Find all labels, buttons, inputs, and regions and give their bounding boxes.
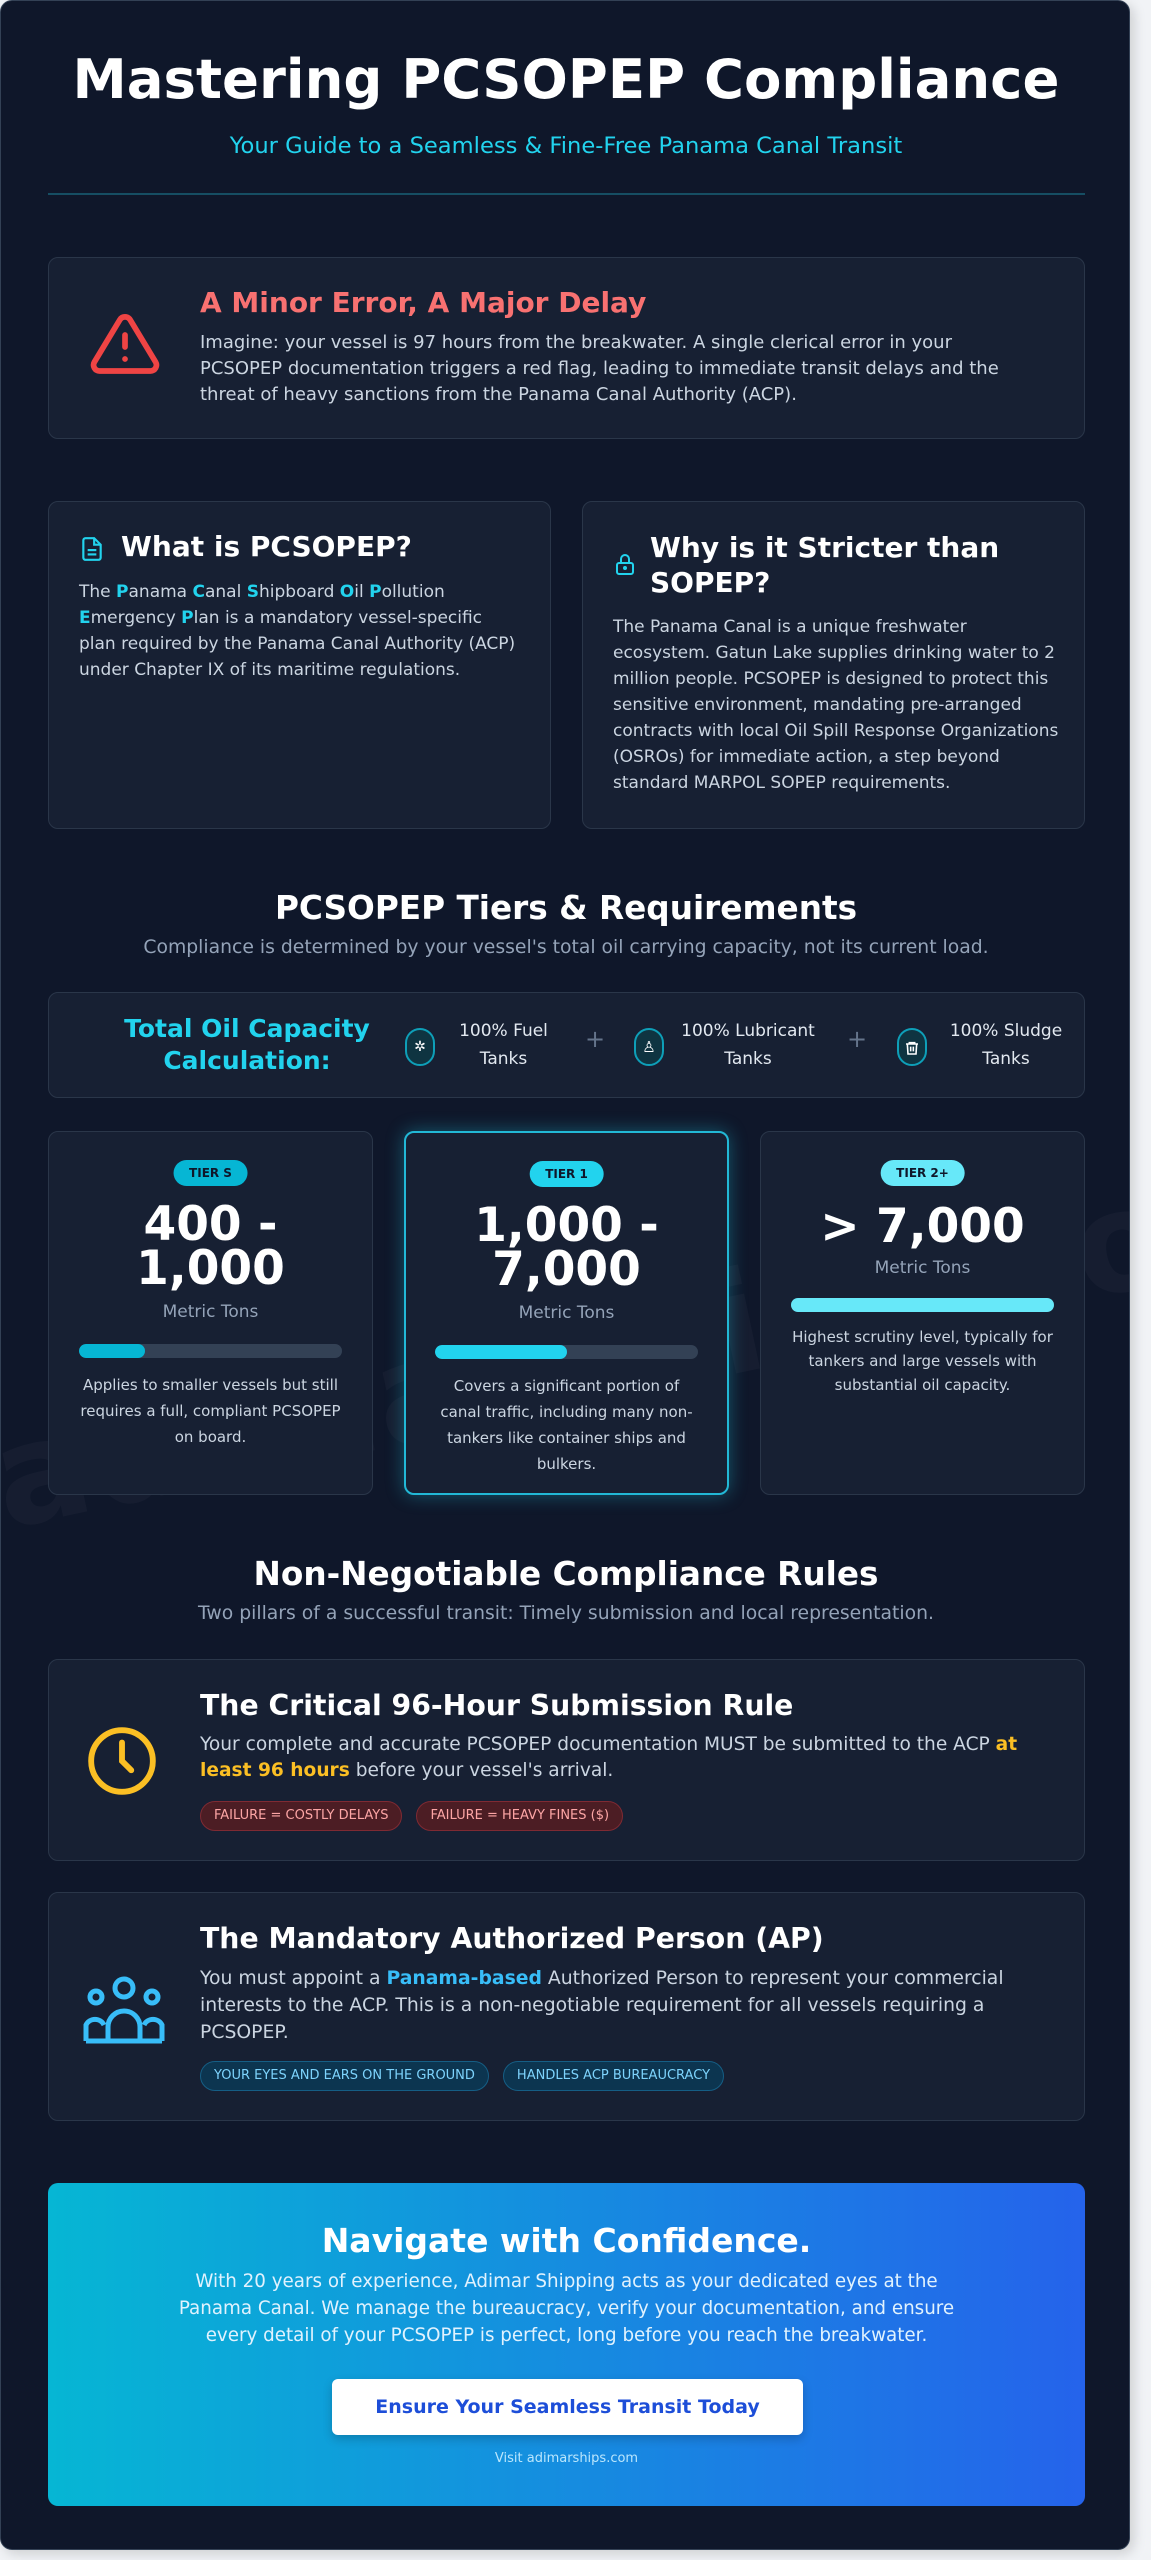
panel: calculation [48, 992, 1085, 1098]
pills: FAILURE = COSTLY DELAYS [214, 1808, 388, 1823]
alert text: Imagine: your vessel is 97 hours from the breakwater. A single clerical error in your PCSOPEP documentation triggers a red flag, leading to immediate transit delays and the threat of heavy sanctions from the Panama Canal Authority (ACP). [200, 332, 999, 405]
item: sludge: 100% Sludge [950, 1021, 1062, 1041]
panel: tier 2+: TIER 2+ [896, 1166, 949, 1180]
panel: tier S: Metric Tons [163, 1302, 258, 1322]
panel: tier S: 400 - [144, 1197, 277, 1252]
panel: tier 1: TIER 1 [545, 1167, 588, 1181]
item: fuel: ✲ [414, 1039, 426, 1055]
panel: tier S: Applies to smaller vessels but still requires a full, compliant PCSOPEP on board. [80, 1376, 341, 1446]
panel: tier 2+ [760, 1131, 1085, 1495]
link: Visit adimarships.com [495, 2451, 638, 2466]
pills: FAILURE = HEAVY FINES ($) [430, 1808, 609, 1823]
item: lubricant [634, 1021, 815, 1069]
cta button [332, 2379, 803, 2435]
text: Your complete and accurate PCSOPEP documentation MUST be submitted to the ACP at least 96 hours before your vessel's arrival. [200, 1734, 1017, 1781]
pills [200, 1801, 623, 1831]
item: fuel: Tanks [480, 1049, 527, 1069]
panel: authorized person [48, 1892, 1085, 2121]
panel: tier 1: 7,000 [492, 1242, 641, 1297]
plus: + [585, 1025, 605, 1053]
subheading: rules: Two pillars of a successful transit: Timely submission and local representation. [198, 1603, 934, 1624]
text: You must appoint a Panama-based Authorized Person to represent your commercial interests to the ACP. This is a non-negotiable requirement for all vessels requiring a PCSOPEP. [200, 1968, 1004, 2043]
heading: What is PCSOPEP? [121, 530, 412, 563]
icon: lock [616, 554, 634, 575]
panel: tier 1: Covers a significant portion of canal traffic, including many non-tankers like container ships and bulkers. [440, 1377, 693, 1473]
pills: YOUR EYES AND EARS ON THE GROUND [214, 2068, 475, 2083]
heading: tiers: PCSOPEP Tiers & Requirements [275, 889, 857, 927]
item: lubricant: Tanks [724, 1049, 772, 1069]
text: The Panama Canal Shipboard Oil Pollution Emergency Plan is a mandatory vessel-specific plan required by the Panama Canal Authority (ACP) under Chapter IX of its maritime regulations. [79, 582, 515, 680]
item: fuel [405, 1021, 548, 1069]
calc label: Calculation: [163, 1046, 331, 1075]
panel: tier 2+: Highest scrutiny level, typically for tankers and large vessels with substantial oil capacity. [792, 1328, 1053, 1394]
panel: tier S: 1,000 [136, 1241, 285, 1296]
pills: HANDLES ACP BUREAUCRACY [517, 2068, 710, 2083]
heading: rules: Non-Negotiable Compliance Rules [254, 1555, 878, 1593]
item: sludge [897, 1021, 1062, 1069]
panel: 96-hour rule [48, 1659, 1085, 1861]
pills [200, 2061, 724, 2091]
heading: The Critical 96-Hour Submission Rule [200, 1689, 793, 1722]
icon: warning [90, 314, 160, 374]
panel: tier 1 [404, 1131, 729, 1495]
panel: stricter [582, 501, 1085, 829]
icon: clock [88, 1727, 156, 1795]
plus: + [847, 1025, 867, 1053]
panel: alert [48, 257, 1085, 439]
panel: tier 2+: > 7,000 [820, 1199, 1025, 1254]
panel: tier 1: Metric Tons [519, 1303, 614, 1323]
item: sludge: Tanks [982, 1049, 1030, 1069]
panel: tier S: TIER S [189, 1166, 232, 1180]
heading: The Mandatory Authorized Person (AP) [200, 1922, 824, 1955]
panel: tier 1: 1,000 - [474, 1198, 659, 1253]
alert heading: A Minor Error, A Major Delay [200, 286, 646, 319]
icon: document [82, 537, 102, 561]
cta text: With 20 years of experience, Adimar Shipping acts as your dedicated eyes at the Panama Canal. We manage the bureaucracy, verify your documentation, and ensure every detail of your PCSOPEP is perfect, long before you reach the breakwater. [179, 2271, 954, 2346]
item: lubricant: 100% Lubricant [681, 1021, 815, 1041]
cta button: Ensure Your Seamless Transit Today [375, 2396, 760, 2418]
panel: what is [48, 501, 551, 829]
icon: people [84, 1976, 164, 2044]
calc label [124, 1014, 370, 1075]
panel: call to action [48, 2183, 1085, 2506]
cta heading: Navigate with Confidence. [322, 2221, 811, 2260]
panel: tier 2+: Metric Tons [875, 1258, 970, 1278]
item: fuel: 100% Fuel [459, 1021, 548, 1041]
item: lubricant: ♙ [642, 1038, 656, 1056]
subheading: tiers: Compliance is determined by your vessel's total oil carrying capacity, not its current load. [143, 937, 989, 958]
calc label: Total Oil Capacity [124, 1014, 370, 1043]
panel: tier S [48, 1131, 373, 1495]
subtitle: Your Guide to a Seamless & Fine-Free Panama Canal Transit [230, 133, 902, 159]
heading: Why is it Stricter than SOPEP? [650, 531, 999, 599]
title: Mastering PCSOPEP Compliance [73, 47, 1059, 111]
text: The Panama Canal is a unique freshwater ecosystem. Gatun Lake supplies drinking water to 2 million people. PCSOPEP is designed to protect this sensitive environment, mandating pre-arranged contracts with local Oil Spill Response Organizations (OSROs) for immediate action, a step beyond standard MARPOL SOPEP requirements. [613, 617, 1058, 793]
